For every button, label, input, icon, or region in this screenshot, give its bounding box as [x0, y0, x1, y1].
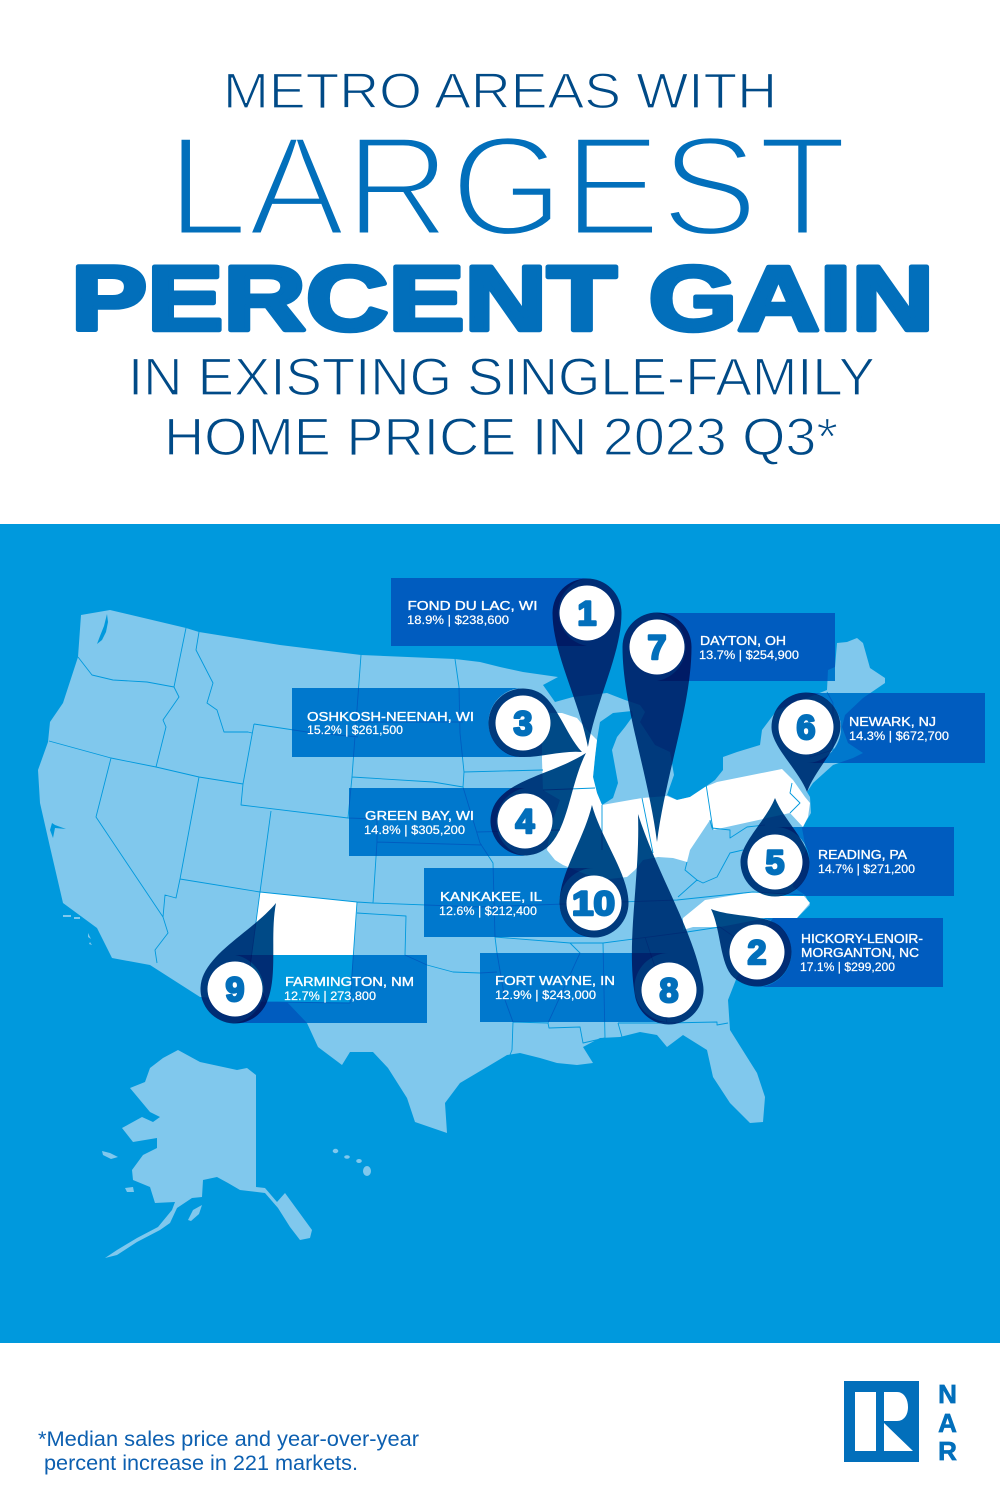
pin circle — [778, 700, 834, 754]
alaska — [102, 1050, 312, 1258]
metro name: NEWARK, NJ — [849, 714, 936, 729]
pin — [604, 808, 709, 1030]
title line: percent gain: PERCENT GAIN — [71, 248, 934, 350]
rank number: 4 — [516, 803, 535, 841]
metro name: KANKAKEE, IL — [440, 889, 542, 904]
map: United States — [38, 610, 885, 1258]
pin circle — [630, 620, 684, 674]
logo square — [844, 1381, 919, 1462]
state borders — [49, 628, 833, 1055]
label box — [775, 827, 954, 896]
metro name: OSHKOSH-NEENAH, WI — [307, 709, 474, 724]
highlighted state: new mexico — [250, 892, 357, 1003]
logo: NAR realtor R — [844, 1379, 957, 1466]
stats: 12.7% | 273,800 — [284, 991, 376, 1003]
callout 4: green bay — [349, 730, 612, 870]
pin — [771, 692, 842, 793]
metro name: FOND DU LAC, WI — [408, 598, 538, 613]
stats: 15.2% | $261,500 — [307, 725, 403, 737]
pin circle — [730, 924, 784, 980]
stats: 14.3% | $672,700 — [849, 731, 949, 743]
stats: 18.9% | $238,600 — [407, 615, 509, 627]
label box — [806, 693, 985, 763]
pin circle — [208, 962, 262, 1016]
callout 10: kankakee — [424, 804, 629, 938]
logo R mark — [855, 1392, 913, 1451]
logo letters — [938, 1379, 957, 1466]
metro name: READING, PA — [818, 847, 907, 862]
pin circle — [496, 696, 550, 750]
callout 1: fond du lac — [391, 578, 622, 747]
callout 5: reading — [740, 798, 954, 896]
metro name second line: MORGANTON, NC — [801, 945, 919, 960]
footnote — [38, 1428, 419, 1475]
pin circle — [642, 962, 696, 1018]
pin — [687, 884, 806, 1001]
callout 2: hickory-lenoir-morganton — [687, 884, 943, 1001]
callout 8: fort wayne — [480, 808, 709, 1030]
pin — [557, 804, 629, 938]
pin — [622, 612, 692, 842]
metro name: FORT WAYNE, IN — [495, 973, 615, 988]
footnote: percent increase in 221 markets. — [44, 1452, 358, 1475]
pin circle — [498, 794, 552, 848]
stats: 17.1% | $299,200 — [800, 962, 895, 974]
rank number: 9 — [226, 971, 244, 1009]
label box — [424, 868, 594, 937]
highlighted state: north carolina — [683, 892, 810, 930]
label box — [480, 953, 669, 1022]
pin circle — [566, 876, 622, 930]
label box — [292, 688, 523, 757]
rank number: 5 — [766, 844, 784, 882]
title line: metro areas with: METRO AREAS WITH — [223, 63, 777, 119]
logo letters: A — [938, 1408, 957, 1438]
contiguous states — [38, 610, 885, 1133]
stats: 12.6% | $212,400 — [439, 906, 537, 918]
label box — [757, 918, 943, 987]
rank number: 2 — [748, 934, 766, 972]
panel: map background — [0, 524, 1000, 1343]
title line: in existing single-family: IN EXISTING SINGLE-FAMILY — [128, 348, 875, 407]
pin — [189, 888, 307, 1035]
rank number: 8 — [660, 972, 678, 1010]
callout 7: dayton — [622, 612, 835, 842]
metro name: GREEN BAY, WI — [365, 808, 474, 823]
logo letters: R — [938, 1436, 957, 1466]
pin circle — [560, 586, 614, 640]
callout 6: newark — [771, 692, 985, 793]
highlighted states: wisconsin illinois indiana ohio pennsylvania new jersey — [542, 713, 810, 880]
stats: 13.7% | $254,900 — [699, 650, 799, 662]
label box — [235, 955, 427, 1023]
rank number: 7 — [648, 629, 666, 667]
metro name: FARMINGTON, NM — [285, 974, 414, 989]
callout 3: oshkosh-neenah — [292, 677, 597, 783]
title — [71, 63, 934, 467]
title line: largest: LARGEST — [167, 107, 847, 266]
metro name: HICKORY-LENOIR- — [801, 931, 923, 946]
label box — [657, 613, 835, 681]
rank number: 1 — [578, 595, 596, 633]
pin — [740, 798, 810, 896]
rank number: 10 — [572, 885, 615, 923]
metro name: DAYTON, OH — [700, 633, 786, 648]
lake michigan — [593, 711, 633, 805]
channel islands — [63, 915, 92, 945]
pin circle — [748, 834, 802, 890]
pin — [476, 730, 612, 870]
label box — [349, 788, 525, 856]
stats: 14.7% | $271,200 — [818, 864, 915, 876]
stats: 14.8% | $305,200 — [364, 825, 465, 837]
hawaii — [333, 1149, 371, 1176]
rank number: 3 — [514, 705, 532, 743]
puget sound and bays — [50, 614, 108, 838]
pin — [552, 578, 622, 747]
footnote: *Median sales price and year-over-year — [38, 1428, 419, 1451]
stats: 12.9% | $243,000 — [495, 990, 596, 1002]
rank number: 6 — [797, 709, 815, 747]
callout 9: farmington — [189, 888, 427, 1035]
title line: home price in 2023 q3: HOME PRICE IN 2023 Q3* — [164, 408, 838, 467]
logo letters: N — [938, 1379, 957, 1409]
pin — [477, 677, 597, 783]
label box — [391, 578, 587, 646]
